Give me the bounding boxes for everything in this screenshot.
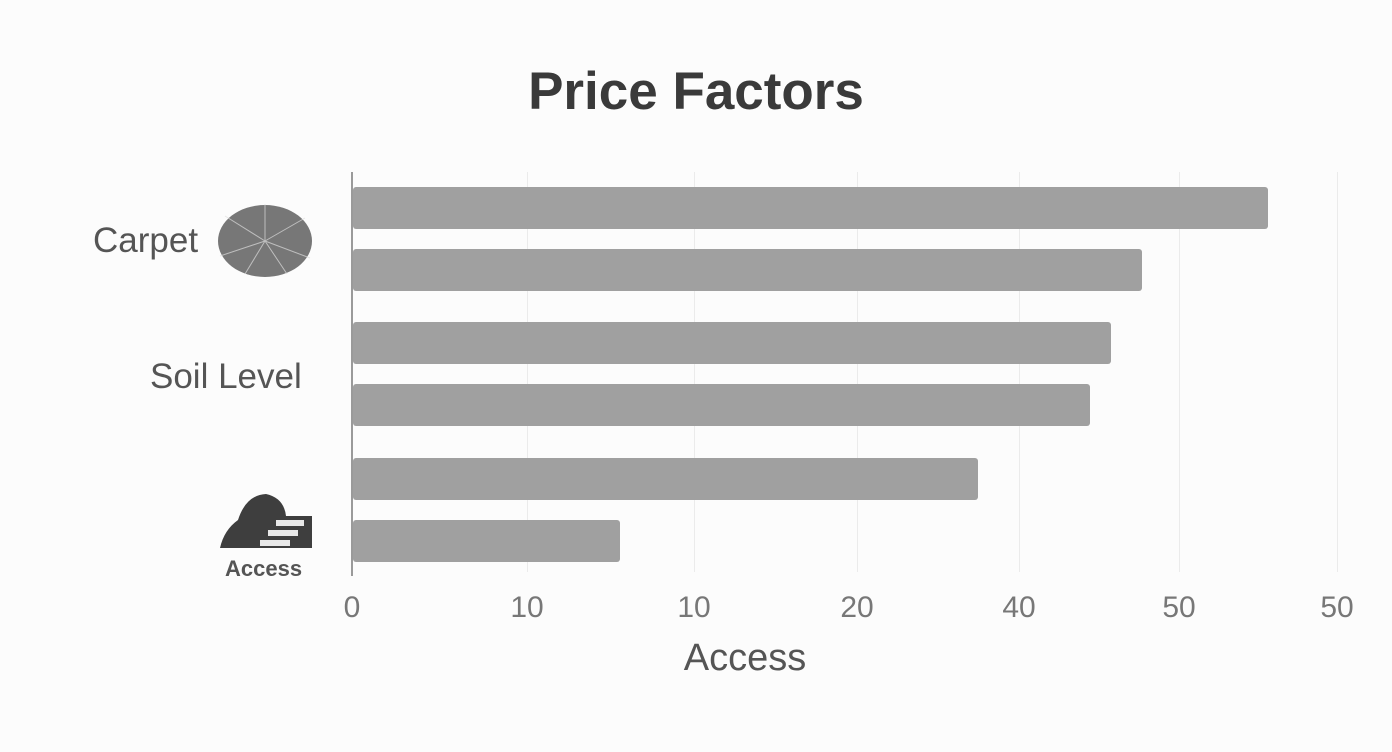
title: Price Factors [528,62,864,121]
bars [353,187,1268,562]
x tick labels: 0 [344,591,360,624]
x tick labels: 50 [1320,591,1354,624]
x tick labels: 10 [677,591,711,624]
label: Access: Access [225,556,302,581]
label: Carpet: Carpet [93,221,198,260]
x tick labels: 10 [510,591,544,624]
x tick labels: 50 [1162,591,1196,624]
label: Soil Level: Soil Level [150,357,302,396]
y axis line [351,172,353,576]
icon: carpet fiber [218,204,312,277]
x tick labels: 20 [840,591,874,624]
x tick labels: 40 [1002,591,1036,624]
x axis title: Access [684,637,806,679]
icon: access steps [220,494,312,548]
